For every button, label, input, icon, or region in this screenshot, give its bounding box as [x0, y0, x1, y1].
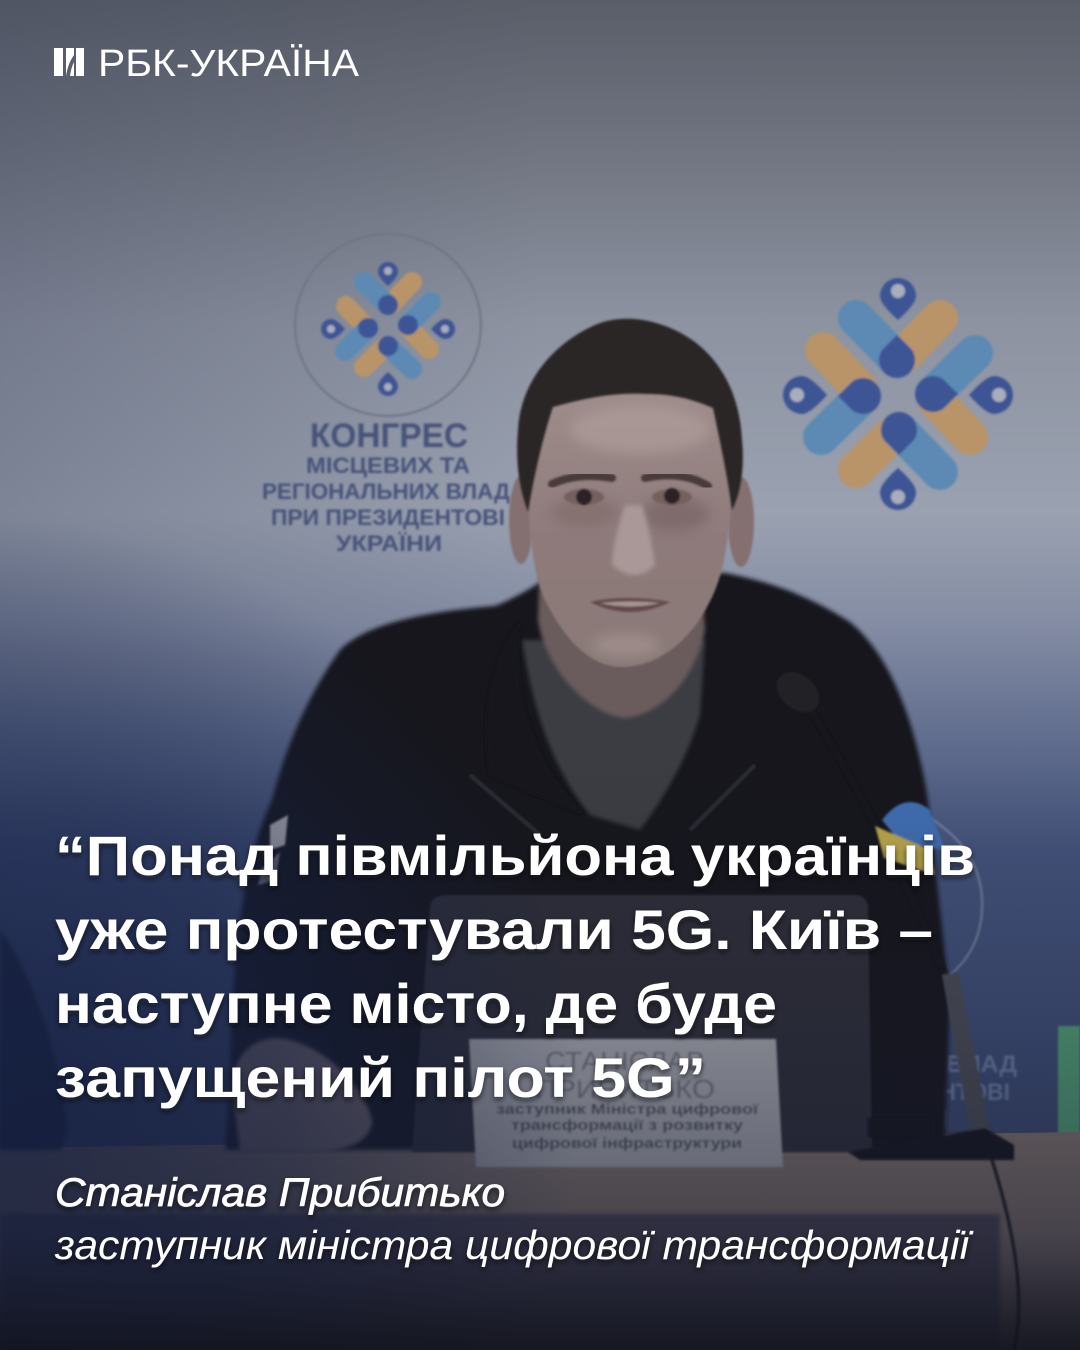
background caption, lower right: ДЕНТОВІ: [908, 1079, 1010, 1106]
name card: ПРИБИТЬКО: [535, 1074, 715, 1104]
ring fragment of third logo behind flag: [925, 815, 982, 975]
hoodie body: [225, 573, 950, 1150]
headline quote: запущений пілот 5G”: [55, 1046, 706, 1109]
emblem: small congress logo with ring and caption: КОНГРЕС: [310, 417, 468, 455]
headline quote: [55, 824, 975, 1109]
brows: [552, 475, 708, 486]
name card: трансформації з розвитку: [511, 1117, 744, 1134]
sleeve patch: [258, 815, 288, 885]
eye sockets: [551, 497, 619, 527]
mouth: [590, 598, 670, 612]
name card: заступник Міністра цифрової: [496, 1101, 759, 1118]
background caption, lower right: НИ: [925, 1105, 947, 1132]
eyes: [564, 488, 692, 505]
hand: [232, 1038, 372, 1152]
green object at right: [1058, 1026, 1080, 1150]
icon: logo mark: [54, 48, 84, 76]
brand name: РБК-УКРАЇНА: [98, 43, 360, 85]
hoodie collar: [486, 622, 585, 815]
emblem: small congress logo with ring and caption: [262, 234, 510, 556]
emblem: small congress logo with ring and caption: МІСЦЕВИХ ТА: [306, 453, 470, 478]
logo: РБК-Україна: [54, 43, 360, 85]
nose: [612, 505, 655, 575]
small flag: [875, 802, 945, 875]
speaker role: заступник міністра цифрової трансформації: [54, 1222, 974, 1268]
hair: [517, 319, 743, 512]
headline quote: уже протестували 5G. Київ –: [55, 898, 933, 961]
face: [529, 380, 732, 667]
forehead highlight: [570, 406, 710, 454]
table: [0, 1132, 1080, 1350]
emblem: small congress logo with ring and caption: РЕГІОНАЛЬНИХ ВЛАД: [262, 479, 510, 504]
attribution: [54, 1171, 974, 1268]
lighting overlays over lower photo: [0, 500, 1080, 1350]
background caption, lower right: [905, 1051, 1017, 1132]
emblem: small congress logo with ring and caption: ПРИ ПРЕЗИДЕНТОВІ: [271, 505, 505, 530]
laptop: [412, 895, 872, 1152]
neck shadow and t-shirt: [522, 640, 705, 830]
person at far left edge: [0, 930, 68, 1150]
zip seam: [470, 765, 755, 835]
name card: СТАНІСЛАВ: [545, 1046, 705, 1076]
photo: speaker: [225, 319, 950, 1150]
chin highlight: [592, 633, 660, 657]
microphone: [769, 664, 1019, 1350]
headline quote: наступне місто, де буде: [55, 972, 777, 1035]
name card: [469, 1039, 783, 1167]
background caption, lower right: ИХ ВЛАД: [905, 1051, 1017, 1078]
emblem: large congress logo on wall: [783, 278, 1013, 510]
name card: цифрової інфраструктури: [512, 1135, 742, 1152]
speaker name: Станіслав Прибитько: [55, 1171, 505, 1215]
emblem: small congress logo with ring and caption: УКРАЇНИ: [336, 531, 442, 556]
ears: [509, 476, 533, 564]
headline quote: “Понад півмільйона українців: [55, 824, 975, 887]
